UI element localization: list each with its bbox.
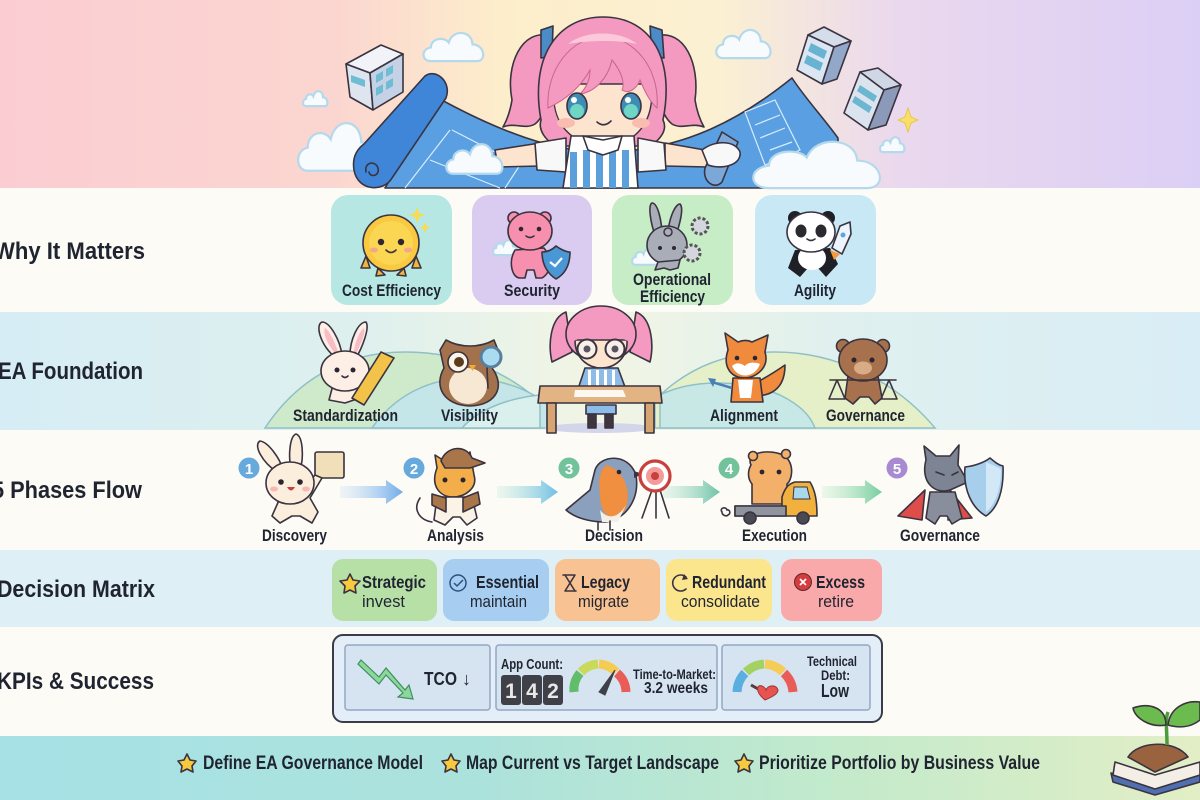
icon: pink bear with shield	[493, 212, 570, 279]
icon: large cloud bottom right	[753, 142, 880, 188]
badge 2: 2	[410, 461, 418, 478]
action text: Map Current vs Target Landscape	[466, 753, 719, 774]
badge 1: 1	[245, 461, 253, 478]
arrow 2 to 3	[497, 480, 558, 504]
label: Security	[504, 281, 560, 300]
footer action items	[178, 753, 1040, 774]
card: redundant consolidate: Redundant	[692, 572, 766, 592]
arrow 3 to 4	[663, 480, 720, 504]
KPI: TCO	[345, 645, 490, 710]
star icon	[442, 754, 460, 772]
character: bunny with clipboard	[258, 434, 344, 523]
KPI: technical debt	[722, 645, 870, 710]
hero illustration: girl with blueprint	[298, 17, 918, 188]
blueprint sheet	[353, 74, 838, 188]
card: excess retire: retire	[818, 592, 854, 611]
card: strategic invest: invest	[362, 592, 405, 611]
panel: decision matrix	[332, 559, 882, 621]
label: Discovery	[262, 526, 327, 545]
character: owl with magnifier	[440, 340, 501, 406]
card: excess retire	[781, 559, 882, 621]
character: fox	[708, 333, 785, 402]
star icon	[735, 754, 753, 772]
icon: building right bottom	[844, 68, 901, 130]
card: agility	[755, 195, 876, 305]
right arm	[665, 143, 708, 167]
KPI: technical debt: Technical	[807, 653, 857, 669]
star icon	[178, 754, 196, 772]
card: essential maintain	[443, 559, 549, 621]
hair cap	[538, 17, 666, 146]
counter digits	[501, 675, 563, 705]
card: redundant consolidate: consolidate	[681, 592, 760, 611]
KPI: app count and time to market: 3.2 weeks	[644, 680, 708, 697]
character: pink-haired girl	[495, 17, 708, 188]
character: detective cat	[417, 449, 485, 525]
character: wolf with cape and shield	[898, 445, 1003, 524]
icon: cloud at left hand	[446, 144, 502, 174]
card: cost efficiency	[331, 195, 452, 305]
panel: EA foundation arches and characters	[265, 306, 935, 433]
icon: glove and rolled paper	[702, 132, 740, 185]
character: bear with scales	[829, 339, 897, 404]
card: excess retire: Excess	[816, 572, 865, 592]
counter digits: 4	[526, 680, 538, 703]
badge 4: 4	[725, 461, 734, 478]
label: Analysis	[427, 526, 484, 545]
badge 4	[718, 458, 740, 478]
badge 5	[886, 458, 908, 478]
card: redundant consolidate	[666, 559, 772, 621]
card: essential maintain: maintain	[470, 592, 527, 611]
label: Cost Efficiency	[342, 281, 441, 300]
arches right	[655, 352, 935, 428]
badge 3	[558, 458, 580, 478]
character: hamster on truck	[721, 450, 817, 524]
arrow 4 to 5	[822, 480, 882, 504]
counter digits: 2	[547, 680, 559, 703]
card: operational efficiency	[612, 195, 733, 306]
section heading: EA foundation: EA Foundation	[0, 358, 143, 385]
label: Decision	[585, 526, 643, 545]
gauge	[574, 664, 626, 695]
cheeks	[557, 118, 575, 128]
label: Execution	[742, 526, 807, 545]
badge 2	[404, 458, 424, 478]
section heading: KPIs and success: KPIs & Success	[0, 668, 154, 695]
apron	[563, 136, 638, 188]
panel: KPI dashboard	[333, 635, 882, 722]
card: essential maintain: Essential	[476, 572, 539, 592]
card: legacy migrate: Legacy	[581, 572, 630, 592]
character: bunny with ruler	[319, 322, 394, 405]
action text: Prioritize Portfolio by Business Value	[759, 753, 1040, 774]
icon: building right top	[797, 27, 851, 84]
icon: grey bunny with gears	[632, 203, 708, 270]
counter digits: 1	[505, 680, 517, 703]
KPI: technical debt: Low	[821, 681, 850, 701]
right pigtail	[654, 35, 704, 127]
label: Standardization	[293, 406, 398, 425]
character: girl at desk	[538, 306, 662, 433]
card: strategic invest: Strategic	[362, 572, 426, 592]
KPI: technical debt: Debt:	[821, 667, 850, 683]
KPI: app count and time to market: Time-to-Market:	[633, 666, 716, 682]
icon: panda with rocket	[787, 211, 851, 277]
section heading: decision matrix: Decision Matrix	[0, 576, 155, 603]
panel: why it matters cards	[331, 195, 876, 306]
hair bows	[541, 26, 553, 58]
action text: Define EA Governance Model	[203, 753, 423, 774]
KPI: TCO: ↓	[462, 669, 471, 689]
card: legacy migrate	[555, 559, 660, 621]
left pigtail	[503, 35, 552, 127]
icon: clouds behind hero	[298, 30, 904, 171]
badge 5: 5	[893, 461, 901, 478]
arrow 1 to 2	[340, 480, 403, 504]
gauge with heart	[737, 664, 793, 700]
arches left	[265, 352, 548, 428]
badge 1	[238, 458, 260, 478]
badge 3: 3	[565, 461, 573, 478]
icon: sprout growing from book	[1111, 702, 1200, 795]
label: Agility	[794, 281, 836, 300]
card: legacy migrate: migrate	[578, 592, 629, 611]
label: Governance	[826, 406, 905, 425]
label: Visibility	[441, 406, 498, 425]
card: security	[472, 195, 592, 305]
eyes	[567, 93, 587, 119]
face	[554, 84, 652, 146]
icon: building left	[346, 45, 403, 110]
panel: 5 phases flow	[238, 434, 1003, 545]
character: robin and target	[566, 458, 670, 530]
sleeves	[535, 138, 566, 172]
KPI: TCO: TCO	[424, 668, 457, 689]
left arm	[495, 143, 540, 167]
icon: sparkle	[898, 108, 918, 132]
mouth	[597, 121, 611, 125]
label second line: Efficiency	[640, 287, 705, 306]
label: Governance	[900, 526, 980, 545]
collar	[583, 136, 622, 155]
KPI: app count and time to market	[496, 645, 717, 710]
card: strategic invest	[332, 559, 437, 621]
label: Alignment	[710, 406, 778, 425]
bangs	[548, 36, 657, 108]
label: Operational	[633, 270, 711, 289]
icon: coin character	[361, 207, 430, 276]
KPI: app count and time to market: App Count:	[501, 657, 563, 673]
